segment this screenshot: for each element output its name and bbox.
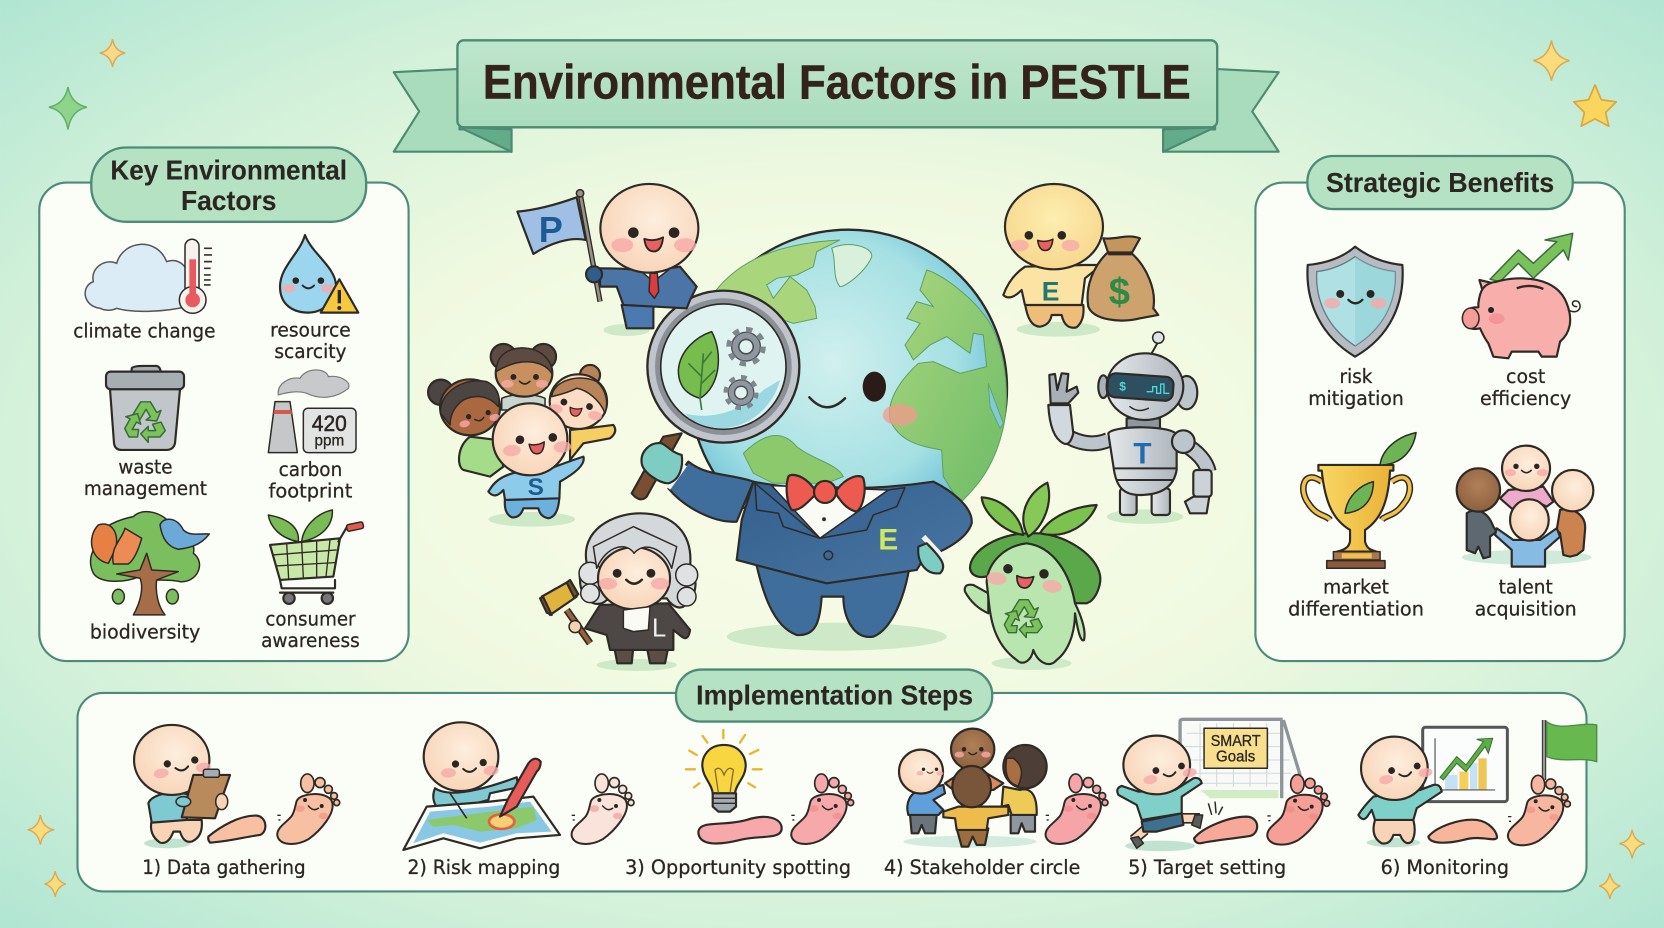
robe letter L: L bbox=[652, 615, 666, 643]
icon: climate change bbox=[85, 239, 212, 313]
money sign: $ bbox=[1109, 271, 1130, 314]
label: waste management: waste bbox=[118, 455, 172, 478]
label: 5) Target setting bbox=[1128, 856, 1286, 879]
label: consumer awareness: consumer bbox=[265, 608, 356, 631]
character: legal L judge bbox=[540, 513, 698, 671]
icon: water drop with warning bbox=[280, 235, 358, 313]
character with clipboard and foot pair bbox=[134, 725, 340, 848]
sign text: SMART Goals: SMART bbox=[1211, 733, 1261, 750]
globe head bbox=[690, 230, 1007, 547]
label: cost efficiency: cost bbox=[1506, 365, 1546, 388]
panel: strategic benefits bbox=[1255, 156, 1625, 661]
title: Environmental Factors in PESTLE bbox=[483, 57, 1191, 110]
icon: trophy with leaf bbox=[1303, 433, 1416, 568]
character: social S with crowd bbox=[428, 344, 615, 527]
label: 6) Monitoring bbox=[1381, 856, 1509, 879]
sign text: SMART Goals: Goals bbox=[1216, 749, 1255, 766]
suit letter E: E bbox=[878, 524, 898, 557]
label: 4) Stakeholder circle bbox=[884, 856, 1080, 879]
step 5: target setting bbox=[1117, 719, 1330, 879]
bow tie bbox=[787, 475, 865, 512]
title banner bbox=[394, 40, 1279, 152]
suit body bbox=[737, 482, 972, 583]
label: climate change: climate change bbox=[73, 319, 215, 342]
icon: piggy bank with arrow bbox=[1462, 233, 1580, 358]
label: talent acquisition: acquisition bbox=[1475, 597, 1577, 620]
label: 2) Risk mapping bbox=[408, 856, 560, 879]
label: 1) Data gathering bbox=[142, 856, 306, 879]
stakeholder group and foot bbox=[899, 729, 1108, 848]
step 1: data gathering bbox=[134, 725, 340, 879]
panel heading: implementation steps bbox=[676, 670, 992, 722]
text: 420 ppm reading: ppm bbox=[314, 433, 344, 450]
left arm bbox=[668, 462, 753, 522]
step 3: opportunity spotting bbox=[625, 730, 854, 879]
text: 420 ppm reading: 420 bbox=[312, 411, 347, 436]
icon: shield bbox=[1307, 247, 1403, 357]
label: consumer awareness bbox=[261, 608, 360, 652]
label: market differentiation bbox=[1288, 576, 1424, 620]
character with map, pencil and pale foot bbox=[403, 722, 634, 850]
soccer goal bbox=[1180, 719, 1300, 798]
panel heading: strategic benefits bbox=[1307, 156, 1573, 209]
text: 420 ppm reading bbox=[312, 411, 347, 450]
label: talent acquisition: talent bbox=[1499, 576, 1553, 599]
icon: biodiversity tree bbox=[90, 512, 209, 615]
character: technology T robot: $ bbox=[1119, 380, 1126, 394]
legs bbox=[753, 550, 912, 637]
flag letter P: P bbox=[539, 209, 563, 250]
sign text: SMART Goals bbox=[1211, 733, 1261, 766]
label: carbon footprint: footprint bbox=[269, 480, 353, 503]
label: market differentiation: market bbox=[1323, 576, 1389, 599]
right cuff and hand bbox=[923, 537, 945, 560]
icon: shopping cart with leaves bbox=[268, 510, 364, 604]
panel heading: key environmental factors: Key Environmental bbox=[110, 154, 347, 185]
step 2: risk mapping bbox=[403, 722, 634, 879]
character: economic E with money bag bbox=[1003, 184, 1158, 337]
label: cost efficiency: efficiency bbox=[1480, 387, 1571, 410]
label: waste management: management bbox=[84, 477, 207, 500]
label: biodiversity: biodiversity bbox=[90, 620, 200, 643]
shirt letter E: E bbox=[1042, 276, 1059, 306]
panel: implementation steps bbox=[78, 670, 1597, 891]
label: consumer awareness: awareness bbox=[261, 629, 360, 652]
label: talent acquisition bbox=[1475, 576, 1577, 620]
shirt letter S: S bbox=[528, 474, 544, 501]
label: carbon footprint bbox=[269, 458, 353, 503]
label: cost efficiency bbox=[1480, 365, 1571, 410]
character: technology T robot bbox=[1048, 332, 1212, 524]
label: risk mitigation bbox=[1308, 365, 1404, 410]
panel heading: key environmental factors bbox=[91, 148, 366, 222]
central mascot: globe in a suit bbox=[632, 230, 1007, 651]
icon: recycling bin bbox=[106, 366, 184, 450]
label: 3) Opportunity spotting bbox=[625, 856, 851, 879]
step 6: monitoring bbox=[1358, 720, 1597, 879]
panel heading: key environmental factors: Factors bbox=[181, 185, 276, 216]
icon: light bulb and foot pair bbox=[686, 730, 854, 844]
panel heading: implementation steps: Implementation Steps bbox=[696, 680, 973, 711]
icon: team in a circle bbox=[1457, 446, 1593, 567]
panel: key environmental factors bbox=[39, 148, 409, 661]
label: waste management bbox=[84, 455, 207, 500]
chest letter T: T bbox=[1133, 438, 1152, 471]
label: resource scarcity bbox=[270, 318, 351, 363]
label: resource scarcity: resource bbox=[270, 318, 351, 341]
kicking character and foot pair bbox=[1117, 736, 1330, 851]
magnifying glass bbox=[632, 291, 799, 499]
label: carbon footprint: carbon bbox=[279, 458, 342, 481]
label: risk mitigation: mitigation bbox=[1308, 387, 1404, 410]
label: risk mitigation: risk bbox=[1340, 365, 1372, 388]
label: market differentiation: differentiation bbox=[1288, 597, 1424, 620]
character: politics P with flag bbox=[517, 184, 698, 336]
character: leaf sprite bbox=[965, 483, 1100, 670]
panel heading: strategic benefits: Strategic Benefits bbox=[1326, 167, 1554, 198]
step 4: stakeholder circle bbox=[884, 729, 1108, 879]
label: resource scarcity: scarcity bbox=[274, 340, 347, 363]
chart board, character, flag and foot pair bbox=[1358, 720, 1597, 847]
icon: carbon footprint bbox=[268, 370, 356, 453]
